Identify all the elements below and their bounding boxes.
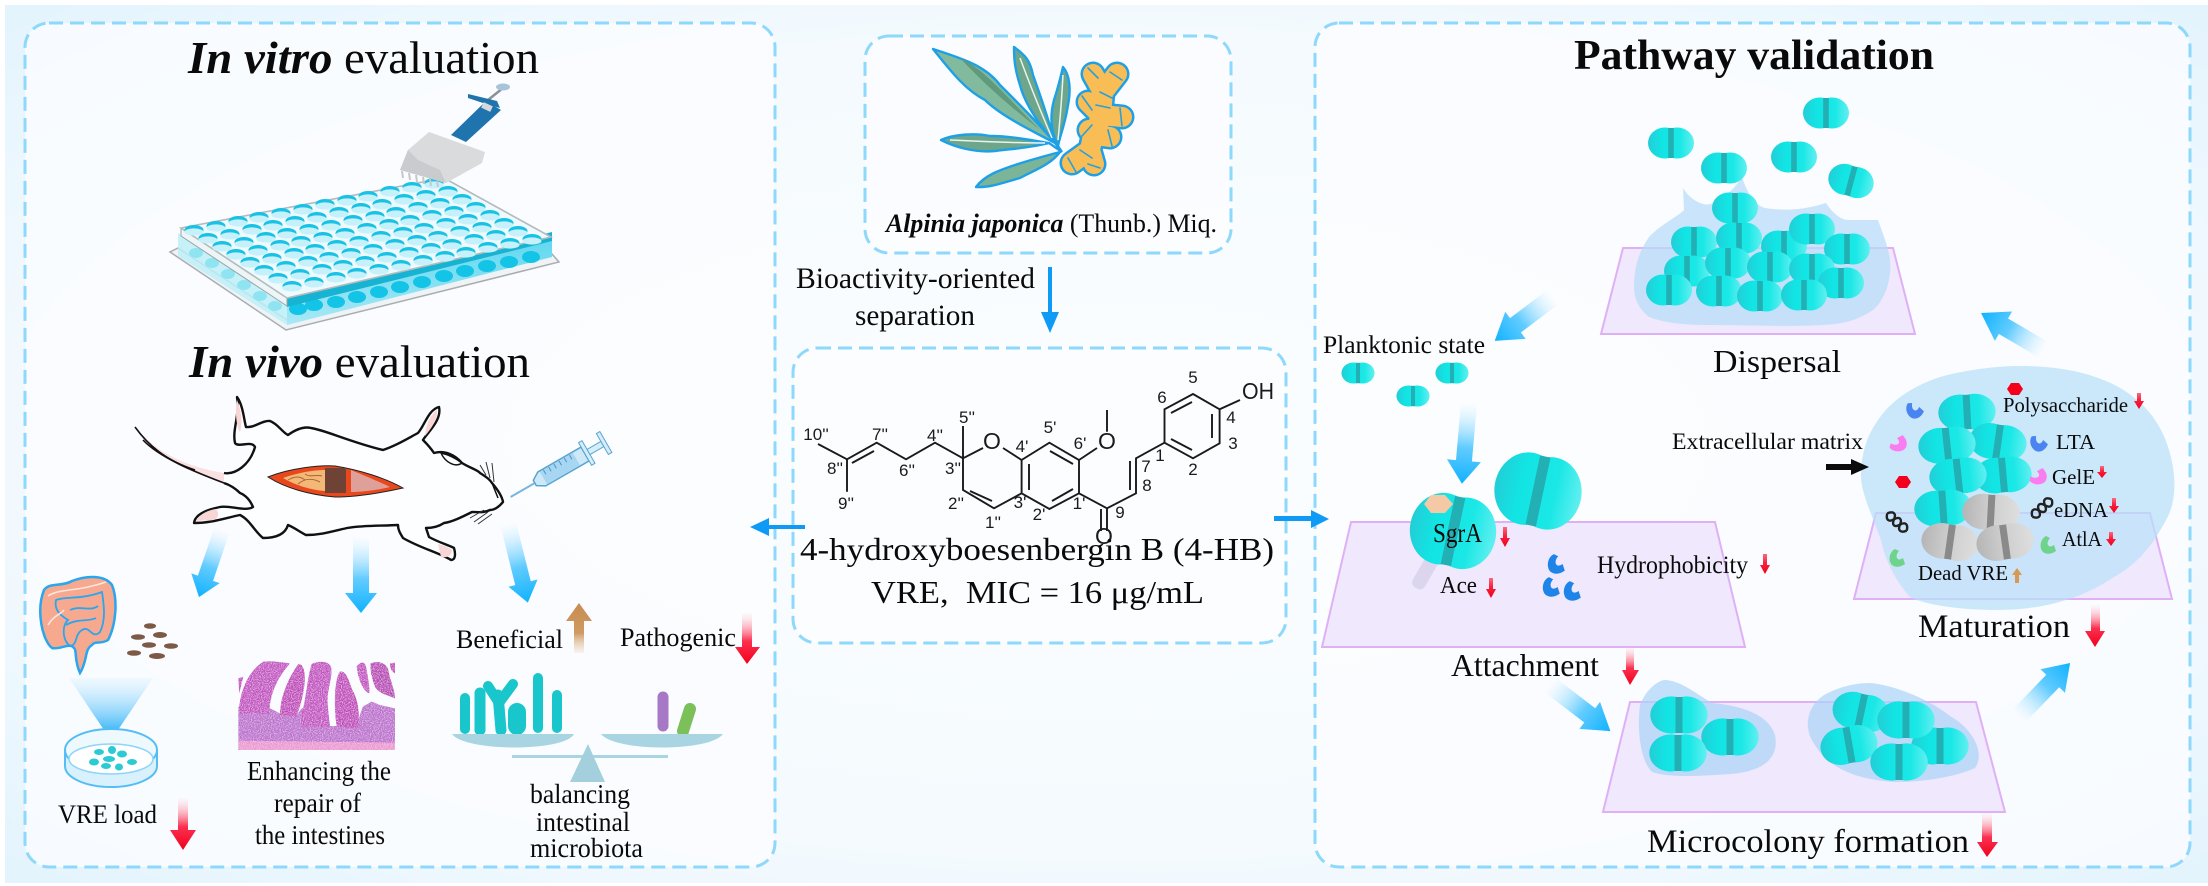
label: MIC value: VRE, MIC = 16 μg/mL [871,574,1204,610]
icon: hydrophobic crescents [1543,554,1581,601]
icon: eDNA strands [1884,496,2055,534]
text: enhancing the repair of the intestines: the intestines [255,820,385,850]
icon: polysaccharide hexagons [1895,383,2023,488]
text: enhancing the repair of the intestines: Enhancing the [247,756,391,786]
label: SgrA: SgrA [1433,518,1482,548]
chemical structure: 4-hydroxyboesenbergin B: O [1095,523,1113,549]
label: microcolony formation: Microcolony formation [1647,824,1969,860]
chemical structure: 4-hydroxyboesenbergin B: 10'' [803,425,829,444]
text: enhancing the repair of the intestines [247,756,391,850]
chemical structure: 4-hydroxyboesenbergin B: 1' [1073,494,1085,513]
label: polysaccharide: Polysaccharide [2003,393,2128,417]
chemical structure: 4-hydroxyboesenbergin B: 8'' [827,459,843,478]
arrow: compound to evaluation [750,518,805,536]
chemical structure: 4-hydroxyboesenbergin B: 4'' [927,426,943,445]
arrow: maturation to dispersal [1972,298,2053,365]
icon: syringe [504,431,612,508]
arrow: VRE load decreases [170,798,196,850]
chemical structure: 4-hydroxyboesenbergin B: 7 [1141,457,1151,476]
arrow: planktonic to attachment [1445,402,1486,485]
label: dead VRE: Dead VRE [1918,561,2008,585]
panel: compound structure [793,348,1286,643]
chemical structure: 4-hydroxyboesenbergin B: O [1098,428,1116,454]
label: attachment: Attachment [1451,647,1599,683]
chemical structure: 4-hydroxyboesenbergin B: 6'' [899,461,915,480]
arrow: maturation decreases [2085,605,2105,647]
arrow: dead VRE increases [2012,568,2022,583]
illustration: dissected mouse [135,397,503,560]
text: balancing intestinal microbiota: microbiota [530,833,643,863]
arrow: SgrA decreases [1500,527,1510,547]
icon: petri dish [65,729,157,787]
arrow: microcolony to maturation [2006,651,2082,729]
arrow: microcolony decreases [1977,813,1998,857]
label: bioactivity-oriented separation [796,262,1035,332]
arrow: pathogenic decreases [735,613,760,664]
arrow: mouse to microbiota [493,519,542,606]
label: species name: Alpinia japonica (Thunb.) Miq. [884,209,1217,238]
arrow: beneficial increases [566,603,592,653]
chemical structure: 4-hydroxyboesenbergin B: 5'' [959,408,975,427]
text: balancing intestinal microbiota: intestinal [536,807,630,837]
arrow: compound to pathway [1274,510,1329,528]
panel: in vitro and in vivo evaluation [25,23,775,867]
icon: multichannel pipette [400,84,510,187]
chemical structure: 4-hydroxyboesenbergin B: 1'' [985,513,1001,532]
label: LTA: LTA [2056,430,2096,454]
label: pathogenic: Pathogenic [620,623,736,652]
chemical structure: 4-hydroxyboesenbergin B: 5' [1044,418,1056,437]
icon: feces pellets [127,623,178,659]
arrow: attachment decreases [1622,647,1639,685]
text: enhancing the repair of the intestines: repair of [274,788,361,818]
chemical structure: 4-hydroxyboesenbergin B: 3'' [945,459,961,478]
chemical structure: 4-hydroxyboesenbergin B: 2'' [948,494,964,513]
label: dispersal: Dispersal [1713,343,1841,379]
icon: GelE crescents [1888,435,2048,486]
chemical structure: 4-hydroxyboesenbergin B: 3 [1228,434,1238,453]
chemical structure: 4-hydroxyboesenbergin B: 8 [1142,476,1152,495]
label: Ace: Ace [1440,573,1477,599]
icon: intestine [40,577,115,673]
illustration: ginger rhizome [1068,68,1122,172]
chemical structure: 4-hydroxyboesenbergin B: 3' [1014,493,1026,512]
stage: dispersal [1601,98,1915,334]
chemical structure: 4-hydroxyboesenbergin B: 9 [1115,503,1125,522]
arrow: plant to compound [1041,267,1059,333]
arrow: dispersal to planktonic [1484,283,1563,355]
arrow: polysaccharide decreases [2134,393,2144,409]
chemical structure: 4-hydroxyboesenbergin B: 6' [1074,434,1086,453]
arrow: attachment to microcolony [1540,671,1621,745]
arrow: eDNA decreases [2109,498,2119,513]
bacteria: live and dead biofilm stack [1913,393,2036,564]
heading: pathway validation: Pathway validation [1574,33,1934,79]
icon: AtlA crescents [1890,536,2056,567]
arrow: hydrophobicity decreases [1760,554,1770,574]
label: beneficial: Beneficial [456,625,563,654]
label: AtlA: AtlA [2062,527,2103,551]
panel: pathway validation [1315,23,2190,867]
label: VRE load: VRE load [58,800,157,829]
arrow: mouse to histology [345,537,377,613]
chemical structure: 4-hydroxyboesenbergin B: 5 [1188,368,1198,387]
chemical structure: 4-hydroxyboesenbergin B: 9'' [838,494,854,513]
icon: balance scale with microbiota [452,678,723,782]
chemical structure: 4-hydroxyboesenbergin B: O [983,428,1001,454]
arrow: Ace decreases [1486,578,1496,598]
label: hydrophobicity: Hydrophobicity [1597,552,1748,579]
icon: LTA crescents [1903,398,2049,454]
icon: 96-well plate [170,178,559,330]
wound opening [268,466,403,497]
stage: microcolony formation [1603,680,2005,812]
stage: maturation [1854,366,2174,610]
arrow: GelE decreases [2097,466,2107,478]
image: intestinal histology [238,661,395,750]
heading: in vivo evaluation: In vivo evaluation [188,336,530,387]
chemical structure: 4-hydroxyboesenbergin B: 1 [1155,446,1165,465]
label: extracellular matrix: Extracellular matrix [1672,429,1864,454]
chemical structure: 4-hydroxyboesenbergin B: 2 [1188,460,1198,479]
panel: plant source [865,36,1231,253]
illustration: Alpinia japonica leaves [933,47,1070,187]
label: maturation: Maturation [1918,609,2070,645]
icon: light cone [69,678,153,733]
chemical structure: 4-hydroxyboesenbergin B: 6 [1157,388,1167,407]
chemical structure: 4-hydroxyboesenbergin B [803,368,1274,549]
arrow: mouse to intestine [185,525,236,602]
arrow: extracellular matrix pointer [1826,459,1869,475]
chemical structure: 4-hydroxyboesenbergin B: 2' [1033,505,1045,524]
arrow: AtlA decreases [2106,532,2116,546]
heading: in vitro evaluation: In vitro evaluation [187,32,539,83]
label: eDNA: eDNA [2054,498,2109,522]
text: balancing intestinal microbiota [530,779,643,863]
bacteria: planktonic cells [1341,362,1469,407]
label: bioactivity-oriented separation: separation [855,299,975,332]
label: bioactivity-oriented separation: Bioactivity-oriented [796,262,1035,295]
chemical structure: 4-hydroxyboesenbergin B: 4 [1226,408,1236,427]
chemical structure: 4-hydroxyboesenbergin B: 4' [1016,437,1028,456]
stage: attachment [1322,446,1770,647]
label: planktonic state: Planktonic state [1323,332,1485,359]
chemical structure: 4-hydroxyboesenbergin B: OH [1242,378,1274,404]
chemical structure: 4-hydroxyboesenbergin B: 7'' [872,425,888,444]
label: compound name: 4-hydroxyboesenbergin B (4-HB) [800,531,1274,567]
text: balancing intestinal microbiota: balancing [530,779,630,809]
label: GelE: GelE [2052,465,2095,489]
